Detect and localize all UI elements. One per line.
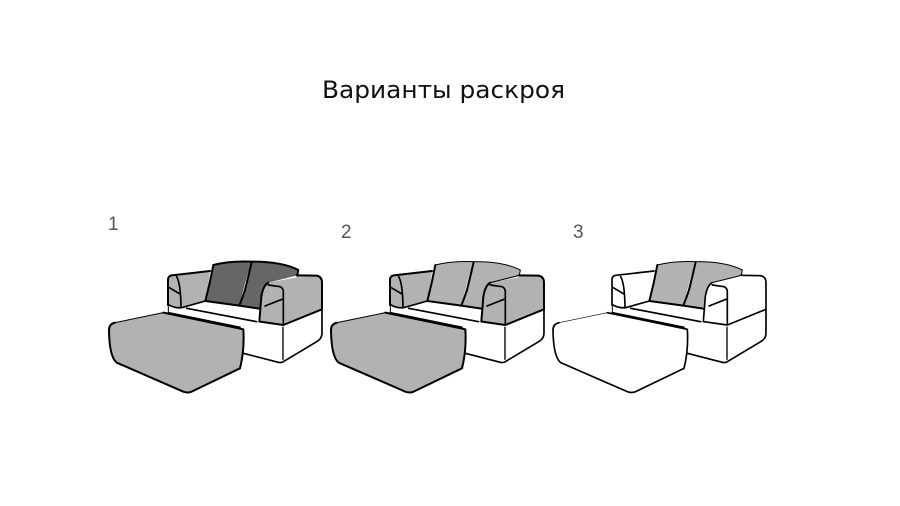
number 1: 1 [108, 214, 119, 235]
number 2: 2 [341, 222, 352, 243]
sofa variant 2 [331, 261, 544, 392]
number 3: 3 [573, 222, 584, 243]
title: Варианты раскроя [322, 76, 565, 104]
sofa variant 1 [109, 261, 322, 392]
sofa variant 3 [553, 261, 766, 392]
